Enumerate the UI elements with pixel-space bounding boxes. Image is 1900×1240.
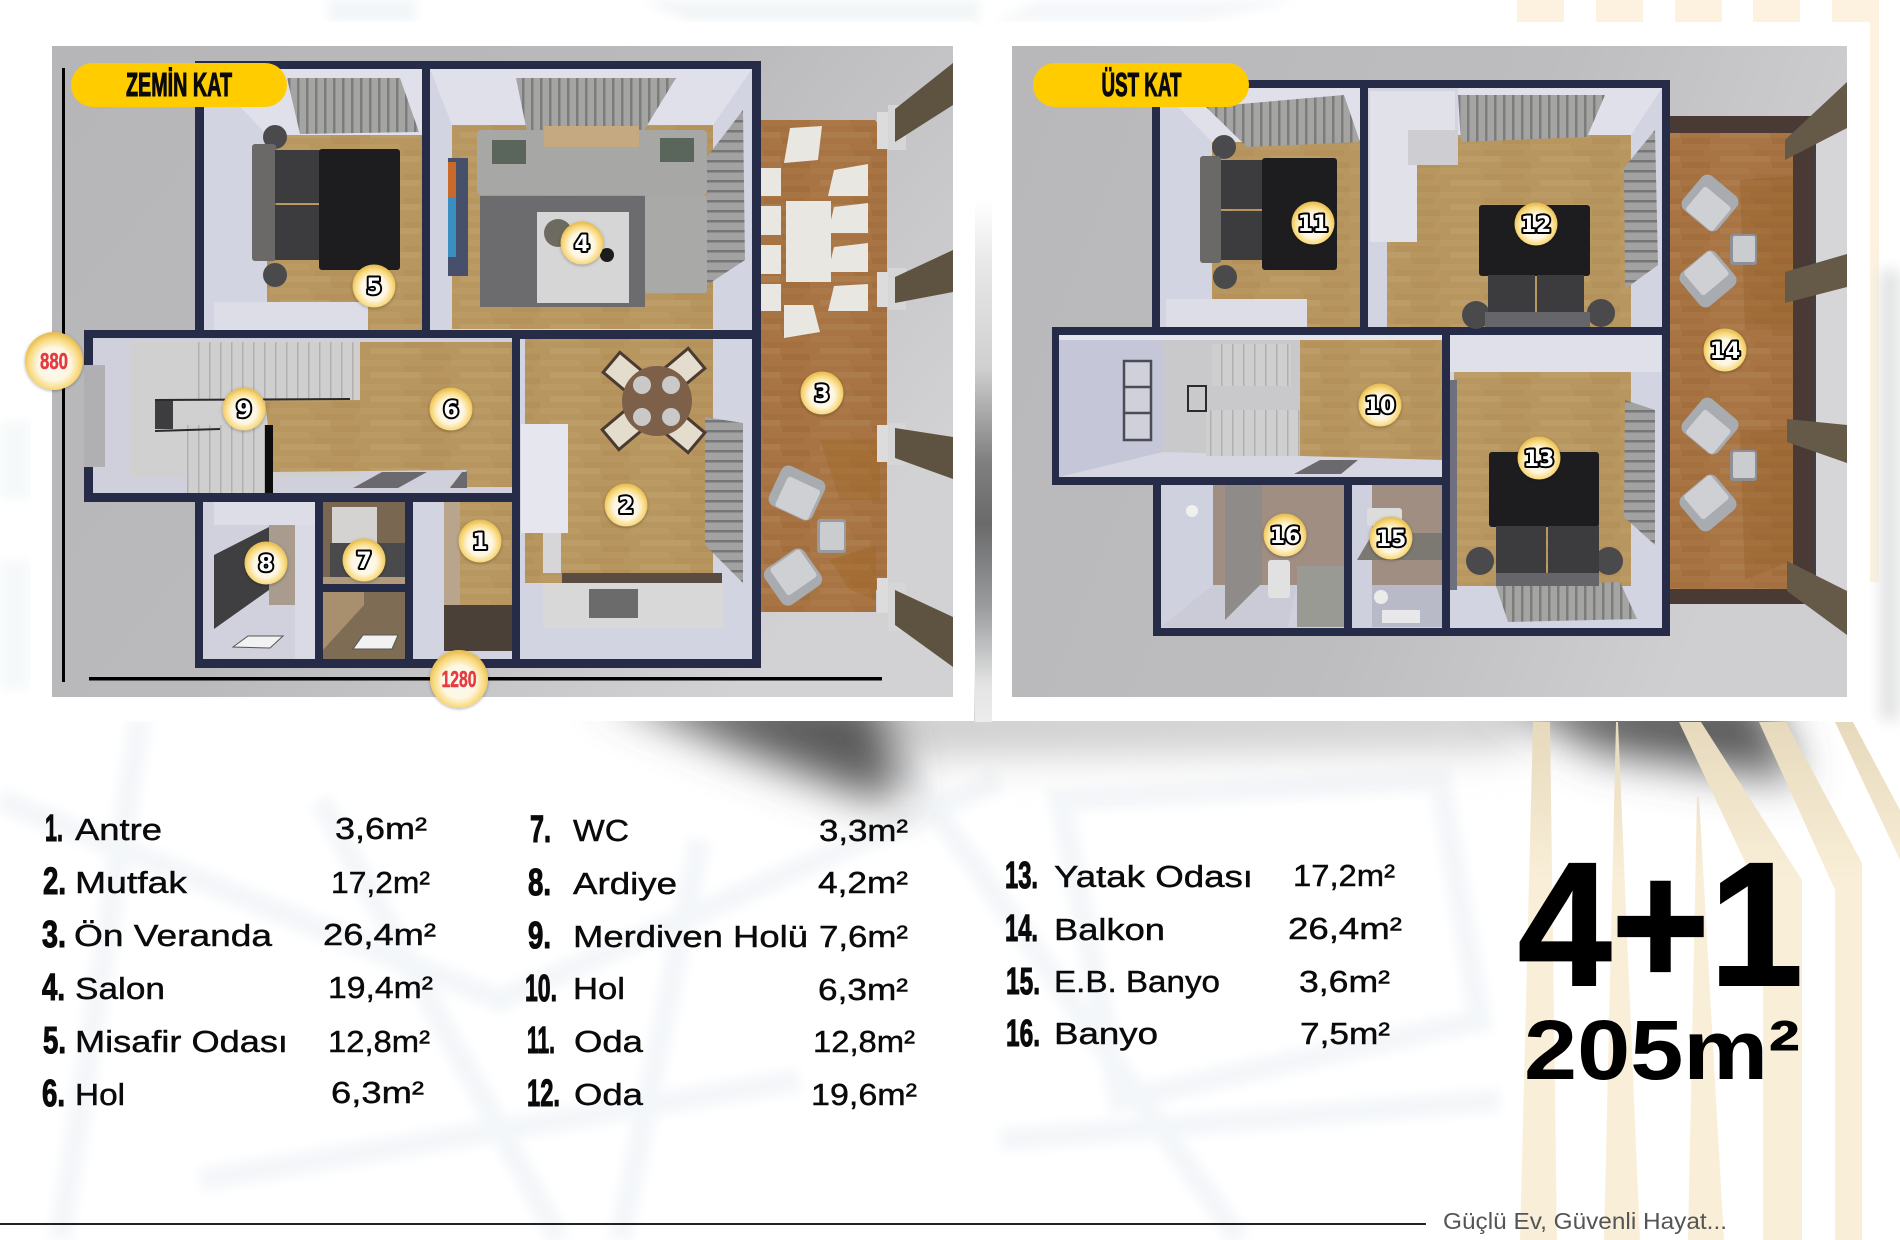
room list: column 2: 12. xyxy=(527,1073,560,1115)
marker 13 xyxy=(1518,436,1560,480)
room list: column 2: Merdiven Holü xyxy=(573,919,808,954)
marker 5 xyxy=(352,264,396,308)
marker 6 xyxy=(430,388,472,430)
room list: column 3: Balkon xyxy=(1054,912,1165,947)
background: gold stripes bottom xyxy=(1520,722,1900,1240)
room 11 bedroom xyxy=(1160,88,1360,327)
room 8 storage xyxy=(203,502,315,659)
dimension badge 880: 880 xyxy=(40,348,68,374)
room list: column 2: Oda xyxy=(574,1024,644,1059)
room list: column 2: 6,3m² xyxy=(818,972,908,1007)
room list: column 2: Ardiye xyxy=(573,866,677,901)
room list: column 3: 15. xyxy=(1006,961,1040,1003)
room list: column 2: WC xyxy=(573,813,629,848)
marker 12 xyxy=(1514,202,1558,246)
dimension badge 1280 xyxy=(430,650,488,708)
room list: column 2: Hol xyxy=(573,971,625,1006)
room list: column 2: 12,8m² xyxy=(813,1024,915,1059)
background: gold stripes top xyxy=(1517,0,1879,582)
room list: column 2: 3,3m² xyxy=(819,813,908,848)
marker 15 xyxy=(1370,516,1412,560)
room list: column 2 xyxy=(525,809,917,1115)
room list: column 3: 3,6m² xyxy=(1299,964,1390,999)
room 10 upper hall with stairs xyxy=(1059,335,1442,477)
panel: ground floor plan xyxy=(25,46,953,708)
dimension badge 1280: 1280 xyxy=(442,666,476,692)
room 4 living room xyxy=(430,69,752,330)
room list: column 2: 7,6m² xyxy=(819,919,908,954)
room 16 bathroom xyxy=(1161,485,1344,628)
room list: column 3: 17,2m² xyxy=(1293,858,1395,893)
room 1 entrance xyxy=(413,502,512,659)
marker 10: 10 xyxy=(1365,394,1395,419)
room list: column 1 xyxy=(42,808,436,1115)
marker 9 xyxy=(222,388,266,430)
room list: column 1: Antre xyxy=(75,812,162,847)
marker 10 xyxy=(1358,384,1402,426)
room list: column 2: 4,2m² xyxy=(818,865,908,900)
balcony armchairs xyxy=(1676,171,1757,535)
room list: column 1: 12,8m² xyxy=(328,1024,430,1059)
room list: column 1: Ön Veranda xyxy=(74,918,273,953)
marker 3: 3 xyxy=(814,382,830,407)
room list: column 1: 17,2m² xyxy=(331,865,430,900)
room list: column 2: 10. xyxy=(525,968,557,1010)
room 6 and 9 hall with stairs xyxy=(84,338,512,493)
room list: column 1: Misafir Odası xyxy=(75,1024,288,1059)
marker 6: 6 xyxy=(443,398,459,423)
outer walls xyxy=(84,61,761,668)
room list: column 2: Oda xyxy=(574,1077,644,1112)
room list: column 1: Hol xyxy=(75,1077,125,1112)
marker 9: 9 xyxy=(236,398,252,423)
room list: column 3: 13. xyxy=(1005,855,1038,897)
room list: column 1: 26,4m² xyxy=(323,917,436,952)
room list: column 3 xyxy=(1005,855,1402,1055)
room list: column 2: 19,6m² xyxy=(811,1077,917,1112)
room list: column 1: 3. xyxy=(42,914,66,956)
marker 8 xyxy=(244,542,288,584)
marker 1 xyxy=(458,520,502,562)
label: ZEMİN KAT: ZEMİN KAT xyxy=(126,66,232,103)
veranda armchairs xyxy=(761,463,846,609)
closet under WC xyxy=(323,592,405,659)
room list: column 1: 6,3m² xyxy=(331,1075,424,1110)
room 5 bedroom xyxy=(204,69,422,330)
veranda dining set xyxy=(761,126,868,338)
room list: column 1: Mutfak xyxy=(75,865,188,900)
room list: column 1: 1. xyxy=(45,808,63,850)
marker 13: 13 xyxy=(1524,447,1554,472)
marker 1: 1 xyxy=(472,530,488,555)
marker 12: 12 xyxy=(1521,213,1551,238)
room list: column 3: Banyo xyxy=(1054,1016,1158,1051)
room list: column 1: 3,6m² xyxy=(335,811,427,846)
panel: upper floor plan xyxy=(1012,46,1847,697)
room number markers xyxy=(222,202,1746,584)
marker 4: 4 xyxy=(574,232,590,257)
room list: column 1: 2. xyxy=(43,861,66,903)
veranda floor xyxy=(761,120,887,612)
marker 8: 8 xyxy=(258,552,274,577)
footer line xyxy=(0,1223,1426,1225)
room list: column 2: 7. xyxy=(530,809,551,851)
marker 2: 2 xyxy=(618,494,634,519)
headline: 4+1: 4+1 xyxy=(1518,827,1803,1023)
marker 5: 5 xyxy=(366,275,382,300)
room list: column 1: 4. xyxy=(42,967,65,1009)
room list: column 1: 5. xyxy=(43,1020,66,1062)
room list: column 3: E.B. Banyo xyxy=(1054,964,1220,999)
room 15 ensuite bathroom xyxy=(1352,485,1442,628)
room list: column 3: 14. xyxy=(1005,908,1038,950)
marker 11 xyxy=(1292,202,1334,244)
label: ÜST KAT: ÜST KAT xyxy=(1102,66,1182,103)
marker 3 xyxy=(800,372,844,414)
room list: column 2: 9. xyxy=(528,915,551,957)
background: cast shadow under panels xyxy=(600,270,1900,800)
room 7 WC xyxy=(323,502,405,584)
dimension badge 880 xyxy=(25,332,83,390)
room list: column 3: 16. xyxy=(1006,1013,1040,1055)
marker 16 xyxy=(1264,514,1306,556)
room list: column 1: 19,4m² xyxy=(328,970,433,1005)
balcony beams xyxy=(1785,82,1847,635)
headline: total area: 205m² xyxy=(1524,1003,1800,1097)
room list: column 2: 8. xyxy=(528,862,551,904)
room list: column 1: 6. xyxy=(42,1073,65,1115)
marker 2 xyxy=(604,484,648,526)
marker 15: 15 xyxy=(1376,527,1406,552)
room 2 kitchen xyxy=(520,339,752,659)
marker 14: 14 xyxy=(1710,339,1740,364)
room 12 bedroom xyxy=(1368,88,1662,329)
room list: column 2: 11. xyxy=(527,1020,555,1062)
room 13 bedroom xyxy=(1450,335,1662,628)
marker 7: 7 xyxy=(356,549,372,574)
panel: ground floor white frame xyxy=(31,22,974,721)
gap gradient between panels xyxy=(975,200,992,722)
pillars and beams xyxy=(877,63,953,667)
label: ZEMİN KAT xyxy=(71,63,287,107)
panel: upper floor white frame xyxy=(992,22,1870,721)
marker 7 xyxy=(342,538,386,582)
room list: column 3: Yatak Odası xyxy=(1054,859,1253,894)
room list: column 3: 7,5m² xyxy=(1300,1016,1390,1051)
marker 14 xyxy=(1704,328,1746,372)
upper outer walls xyxy=(1052,80,1670,636)
marker 16: 16 xyxy=(1270,524,1300,549)
marker 11: 11 xyxy=(1298,212,1328,237)
room list: column 1: Salon xyxy=(75,971,165,1006)
marker 4 xyxy=(560,222,604,264)
dimension lines xyxy=(62,68,882,682)
balcony xyxy=(1670,116,1847,605)
label: ÜST KAT xyxy=(1033,63,1249,107)
room list: column 3: 26,4m² xyxy=(1288,911,1402,946)
footer slogan: Güçlü Ev, Güvenli Hayat... xyxy=(1443,1208,1727,1234)
